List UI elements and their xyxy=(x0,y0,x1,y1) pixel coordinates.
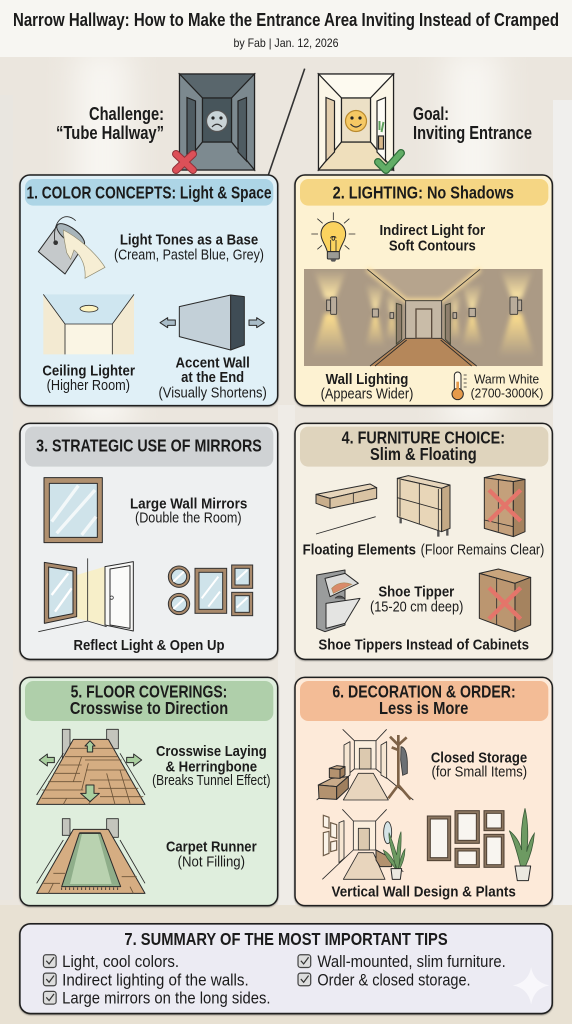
icon: green check xyxy=(378,153,401,170)
icon: shoe tipper xyxy=(317,570,360,632)
header band xyxy=(0,0,572,57)
text: floating elements: Floating Elements xyxy=(303,541,416,558)
text: closed storage: (for Small Items) xyxy=(431,765,527,781)
icon: bright inviting hallway with smile xyxy=(318,74,394,170)
challenge label: “Tube Hallway” xyxy=(56,122,164,143)
text: warm white xyxy=(471,371,543,400)
panel 3: mirrors xyxy=(20,423,278,659)
checklist right xyxy=(298,953,506,989)
icon: wardrobe crossed out xyxy=(484,474,525,537)
text: carpet runner: Carpet Runner xyxy=(166,839,257,856)
text: indirect light xyxy=(379,222,485,254)
heading 4 xyxy=(300,427,548,467)
icon: mirror gallery xyxy=(168,565,253,616)
text: floating elements xyxy=(303,541,544,558)
checklist right: Wall-mounted, slim furniture. xyxy=(317,953,506,971)
text: indirect light: Soft Contours xyxy=(389,237,476,254)
text: reflect light: Reflect Light & Open Up xyxy=(73,637,224,654)
heading 4: 4. FURNITURE CHOICE: xyxy=(342,427,505,447)
heading 2: 2. LIGHTING: No Shadows xyxy=(333,182,514,202)
heading 7: 7. SUMMARY OF THE MOST IMPORTANT TIPS xyxy=(124,929,448,949)
panel 2: lighting xyxy=(295,175,552,406)
text: shoe tippers instead: Shoe Tippers Instead of Cabinets xyxy=(318,636,529,653)
text: light tones: Light Tones as a Base xyxy=(120,232,258,249)
illustration: hallway with storage boxes and coat rack xyxy=(317,729,413,800)
illustration: hallway with frames and plant xyxy=(322,809,405,879)
heading 1 xyxy=(25,179,273,206)
panel 5: floor coverings xyxy=(20,677,278,906)
panel 6: decoration xyxy=(295,677,552,906)
icon: paint bucket pouring xyxy=(38,217,105,278)
byline: by Fab | Jan. 12, 2026 xyxy=(234,36,339,50)
text: wall lighting: (Appears Wider) xyxy=(321,386,413,402)
icon: lighter ceiling xyxy=(43,294,134,354)
heading 1: 1. COLOR CONCEPTS: Light & Space xyxy=(26,182,272,202)
text: wall lighting xyxy=(321,371,413,402)
panel 1: color concepts xyxy=(20,175,278,406)
text: large wall mirrors: (Double the Room) xyxy=(135,511,242,527)
text: warm white: (2700-3000K) xyxy=(471,385,543,400)
icon: accent wall xyxy=(160,295,264,350)
heading 6 xyxy=(300,681,548,721)
text: ceiling lighter: (Higher Room) xyxy=(47,378,130,394)
goal label: Goal: xyxy=(413,103,449,124)
icon: cabinet crossed out xyxy=(479,569,531,632)
text: large wall mirrors: Large Wall Mirrors xyxy=(130,495,247,512)
text: indirect light: Indirect Light for xyxy=(379,222,485,239)
heading 3 xyxy=(25,427,273,467)
text: ceiling lighter xyxy=(42,363,135,394)
illustration: herringbone floor with arrows xyxy=(37,729,145,804)
text: crosswise laying: & Herringbone xyxy=(165,758,257,775)
heading 3: 3. STRATEGIC USE OF MIRRORS xyxy=(36,436,262,456)
challenge label xyxy=(56,103,164,143)
checklist left: Large mirrors on the long sides. xyxy=(62,990,271,1008)
heading 6: 6. DECORATION & ORDER: xyxy=(332,681,516,701)
panel 7: summary xyxy=(20,924,552,1014)
text: accent wall: (Visually Shortens) xyxy=(158,385,267,401)
text: closed storage: Closed Storage xyxy=(431,749,527,766)
text: crosswise laying: (Breaks Tunnel Effect) xyxy=(152,773,270,789)
goal label: Inviting Entrance xyxy=(413,122,532,143)
checklist left: Indirect lighting of the walls. xyxy=(62,971,249,989)
text: carpet runner: (Not Filling) xyxy=(178,855,245,871)
icon: thermometer xyxy=(452,372,467,400)
heading 5: Crosswise to Direction xyxy=(70,698,228,718)
icon: sparkle watermark xyxy=(513,967,549,1004)
heading 4: Slim & Floating xyxy=(370,444,477,464)
challenge label: Challenge: xyxy=(89,103,164,124)
text: accent wall: Accent Wall xyxy=(175,354,250,371)
checklist left xyxy=(43,953,271,1008)
icon: mirror reflecting light by door xyxy=(38,558,133,632)
checklist left: Light, cool colors. xyxy=(62,953,179,971)
text: accent wall xyxy=(158,354,267,401)
text: crosswise laying xyxy=(152,743,270,789)
heading 5 xyxy=(25,681,273,721)
text: warm white: Warm White xyxy=(474,371,539,386)
text: closed storage xyxy=(431,749,527,781)
heading 2 xyxy=(300,179,548,206)
text: light tones xyxy=(114,232,264,263)
divider slash xyxy=(268,69,305,176)
text: accent wall: at the End xyxy=(181,369,244,386)
icon: red cross xyxy=(176,154,193,170)
icon: slim cabinet xyxy=(397,476,450,537)
text: wall lighting: Wall Lighting xyxy=(326,371,408,388)
text: light tones: (Cream, Pastel Blue, Grey) xyxy=(114,247,264,263)
text: vertical wall design: Vertical Wall Design & Plants xyxy=(331,884,516,901)
text: carpet runner xyxy=(166,839,257,871)
text: large wall mirrors xyxy=(130,495,247,527)
text: shoe tipper: (15-20 cm deep) xyxy=(370,600,463,616)
text: ceiling lighter: Ceiling Lighter xyxy=(42,363,135,380)
goal label xyxy=(413,103,532,143)
text: crosswise laying: Crosswise Laying xyxy=(156,743,267,760)
heading 5: 5. FLOOR COVERINGS: xyxy=(71,681,227,701)
panel 4: furniture xyxy=(295,423,552,659)
icon: potted plant xyxy=(509,808,534,881)
illustration: corridor with wall lights xyxy=(304,269,543,366)
text: floating elements: (Floor Remains Clear) xyxy=(421,542,544,558)
icon: floating shelf xyxy=(316,484,377,534)
icon: dark tube hallway with sad face xyxy=(180,74,254,170)
heading 6: Less is More xyxy=(379,698,469,718)
icon: large mirror xyxy=(44,478,102,543)
checklist right: Order & closed storage. xyxy=(317,971,471,989)
icon: framed wall gallery xyxy=(427,811,504,867)
illustration: carpet runner xyxy=(37,819,145,893)
text: shoe tipper: Shoe Tipper xyxy=(378,584,454,601)
icon: light bulb xyxy=(311,212,355,262)
text: shoe tipper xyxy=(370,584,463,616)
